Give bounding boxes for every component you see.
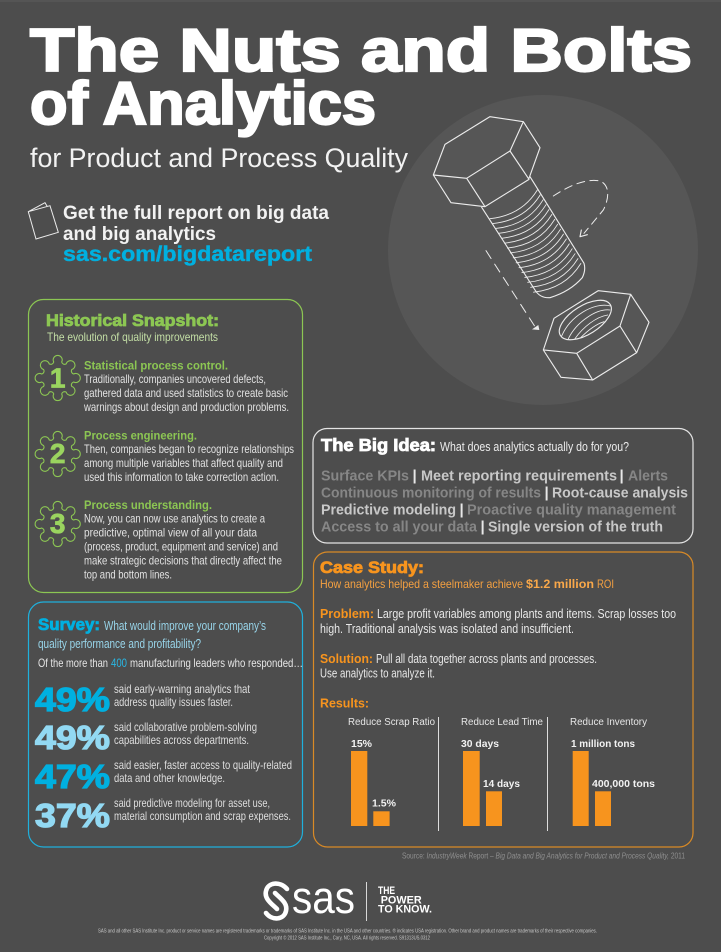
list of analytics capabilities: Surface KPIs bbox=[321, 468, 409, 485]
stat: 37% predictive modeling: 37% bbox=[35, 797, 110, 834]
icon: gear 1 bbox=[35, 355, 80, 401]
step 2: process engineering bbox=[84, 430, 294, 484]
step 2: process engineering: used this information to take correction action. bbox=[84, 470, 279, 484]
logo: SAS: POWER bbox=[381, 894, 422, 906]
stat: 47% access: data and other knowledge. bbox=[114, 771, 225, 785]
solution text: Use analytics to analyze it. bbox=[320, 666, 435, 680]
step 3: process understanding: (process, product, equipment and service) and bbox=[84, 540, 278, 554]
list of analytics capabilities: Alerts bbox=[628, 468, 668, 485]
survey intro: 400 bbox=[111, 656, 127, 670]
stat: 49% early-warning: address quality issues faster. bbox=[114, 695, 233, 709]
list of analytics capabilities: | bbox=[460, 502, 464, 519]
report call to action bbox=[63, 203, 329, 266]
list of analytics capabilities: | bbox=[620, 468, 624, 485]
title: of Analytics bbox=[30, 70, 376, 137]
logo: SAS bbox=[266, 872, 432, 923]
list of analytics capabilities: Access to all your data bbox=[321, 519, 478, 536]
panel: the big idea bbox=[313, 428, 693, 543]
chart: reduce scrap ratio: 1.5% bbox=[372, 798, 396, 810]
list of analytics capabilities: | bbox=[544, 485, 549, 502]
list of analytics capabilities: Predictive modeling bbox=[321, 502, 456, 519]
list of analytics capabilities: | bbox=[412, 468, 417, 485]
stat: 49% collaborative: capabilities across departments. bbox=[114, 733, 249, 747]
chart: reduce lead time: 30 days bbox=[461, 739, 499, 750]
heading: the big idea: The Big Idea: bbox=[321, 435, 436, 455]
problem text: Problem: bbox=[320, 607, 374, 621]
icon: gear 2: 2 bbox=[50, 438, 65, 469]
legal fine print: SAS and all other SAS Institute Inc. product or service names are registered trademarks or trademarks of SAS Institute Inc. in the USA and other countries. ® indicates USA registration. Other brand and product names are trademarks of their respective companies. bbox=[98, 928, 597, 935]
panel: case study bbox=[314, 552, 693, 847]
survey intro: Of the more than bbox=[38, 656, 108, 670]
step 1: statistical process control: warnings about design and production problems. bbox=[83, 400, 289, 414]
stat: 47% access: 47% bbox=[35, 758, 110, 795]
case study subtitle: ROI bbox=[597, 577, 614, 591]
stat: 37% predictive modeling: said predictive modeling for asset use, bbox=[114, 796, 270, 810]
step 3: process understanding: top and bottom lines. bbox=[84, 568, 172, 582]
list of analytics capabilities: Single version of the truth bbox=[488, 519, 663, 536]
list of analytics capabilities bbox=[321, 468, 688, 536]
heading: the big idea: What does analytics actually do for you? bbox=[440, 440, 629, 454]
stat: 49% collaborative: said collaborative problem-solving bbox=[114, 720, 257, 734]
step 3: process understanding: Process understanding. bbox=[84, 500, 212, 512]
title: The Nuts and Bolts bbox=[30, 17, 692, 84]
heading: survey question bbox=[38, 615, 266, 651]
subheading: evolution: The evolution of quality improvements bbox=[47, 330, 218, 344]
panel: survey bbox=[28, 602, 303, 847]
logo: SAS: sas bbox=[292, 872, 355, 923]
step 2: process engineering: among multiple variables that affect quality and bbox=[84, 456, 283, 470]
step 3: process understanding bbox=[84, 500, 282, 582]
step 1: statistical process control bbox=[83, 360, 289, 414]
chart: reduce scrap ratio: Reduce Scrap Ratio bbox=[348, 717, 435, 728]
chart: reduce lead time: Reduce Lead Time bbox=[461, 717, 543, 728]
illustration: bolt and nut in circle bbox=[388, 95, 698, 405]
chart: reduce scrap ratio bbox=[348, 717, 435, 826]
step 3: process understanding: make strategic decisions that directly affect the bbox=[84, 554, 282, 568]
stat: 49% collaborative: 49% bbox=[35, 719, 110, 756]
survey intro bbox=[38, 656, 303, 670]
stat: 49% early-warning: said early-warning analytics that bbox=[114, 682, 251, 696]
chart: reduce inventory: 1 million tons bbox=[571, 739, 635, 750]
results label: Results: bbox=[320, 696, 369, 710]
list of analytics capabilities: | bbox=[480, 519, 485, 536]
survey intro: manufacturing leaders who responded… bbox=[130, 656, 303, 670]
solution text: Pull all data together across plants and processes. bbox=[376, 652, 597, 666]
heading: survey question: quality performance and profitability? bbox=[38, 637, 201, 651]
stat: 37% predictive modeling bbox=[35, 796, 291, 834]
chart: reduce inventory: 400,000 tons bbox=[592, 779, 655, 790]
icon: gear 2 bbox=[35, 431, 80, 477]
logo: SAS: THE bbox=[378, 885, 395, 897]
stat: 37% predictive modeling: material consumption and scrap expenses. bbox=[114, 809, 291, 823]
icon: gear 3: 3 bbox=[50, 508, 65, 539]
stat: 49% collaborative bbox=[35, 719, 257, 756]
logo: SAS: TO KNOW. bbox=[378, 904, 432, 916]
step 1: statistical process control: Statistical process control. bbox=[84, 360, 228, 372]
report call to action: and big analytics bbox=[63, 224, 216, 245]
chart: reduce lead time bbox=[461, 717, 543, 826]
chart: reduce inventory bbox=[570, 717, 655, 826]
list of analytics capabilities: Continuous monitoring of results bbox=[321, 485, 541, 502]
problem text: Large profit variables among plants and items. Scrap losses too bbox=[377, 607, 676, 621]
report call to action: Get the full report on big data bbox=[63, 203, 329, 224]
subtitle: for Product and Process Quality bbox=[30, 143, 408, 173]
stat: 47% access: said easier, faster access to quality-related bbox=[114, 758, 292, 772]
case study subtitle: $1.2 million bbox=[526, 577, 594, 591]
icon: gear 3 bbox=[35, 501, 80, 547]
chart: reduce inventory: Reduce Inventory bbox=[570, 717, 647, 728]
source note: Source: IndustryWeek Report – Big Data and Big Analytics for Product and Process Quality, 2011 bbox=[402, 850, 685, 860]
panel: historical snapshot bbox=[28, 300, 302, 592]
stat: 47% access bbox=[35, 758, 292, 795]
step 2: process engineering: Then, companies began to recognize relationships bbox=[84, 442, 294, 456]
case study subtitle: How analytics helped a steelmaker achieve bbox=[320, 577, 523, 591]
report call to action: sas.com/bigdatareport bbox=[63, 243, 312, 266]
list of analytics capabilities: Proactive quality management bbox=[467, 502, 676, 519]
problem text: high. Traditional analysis was isolated and insufficient. bbox=[320, 622, 574, 636]
heading: historical snapshot: Historical Snapshot: bbox=[46, 311, 219, 330]
legal fine print: Copyright © 2012 SAS Institute Inc., Cary, NC, USA. All rights reserved. S91313US.0312 bbox=[264, 934, 430, 941]
step 3: process understanding: predictive, optimal view of all your data bbox=[84, 526, 257, 540]
heading: survey question: What would improve your company’s bbox=[104, 619, 266, 633]
list of analytics capabilities: Root-cause analysis bbox=[552, 485, 688, 502]
heading: survey question: Survey: bbox=[38, 615, 100, 634]
chart: reduce lead time: 14 days bbox=[483, 779, 520, 790]
step 1: statistical process control: Traditionally, companies uncovered defects, bbox=[84, 372, 266, 386]
icon: gear 1: 1 bbox=[50, 363, 65, 394]
step 1: statistical process control: gathered data and used statistics to create basic bbox=[84, 386, 288, 400]
chart: reduce scrap ratio: 15% bbox=[351, 739, 372, 750]
icon: report booklet bbox=[28, 203, 58, 239]
step 3: process understanding: Now, you can now use analytics to create a bbox=[84, 512, 265, 526]
step 2: process engineering: Process engineering. bbox=[84, 430, 197, 442]
title bbox=[30, 17, 692, 137]
list of analytics capabilities: Meet reporting requirements bbox=[421, 468, 617, 485]
heading: the big idea bbox=[321, 435, 629, 455]
solution text: Solution: bbox=[320, 652, 373, 666]
legal fine print bbox=[98, 928, 597, 941]
solution text bbox=[320, 652, 597, 680]
stat: 49% early-warning: 49% bbox=[35, 681, 110, 718]
problem text bbox=[320, 607, 676, 636]
stat: 49% early-warning bbox=[35, 681, 251, 718]
heading: case study: Case Study: bbox=[320, 558, 424, 577]
